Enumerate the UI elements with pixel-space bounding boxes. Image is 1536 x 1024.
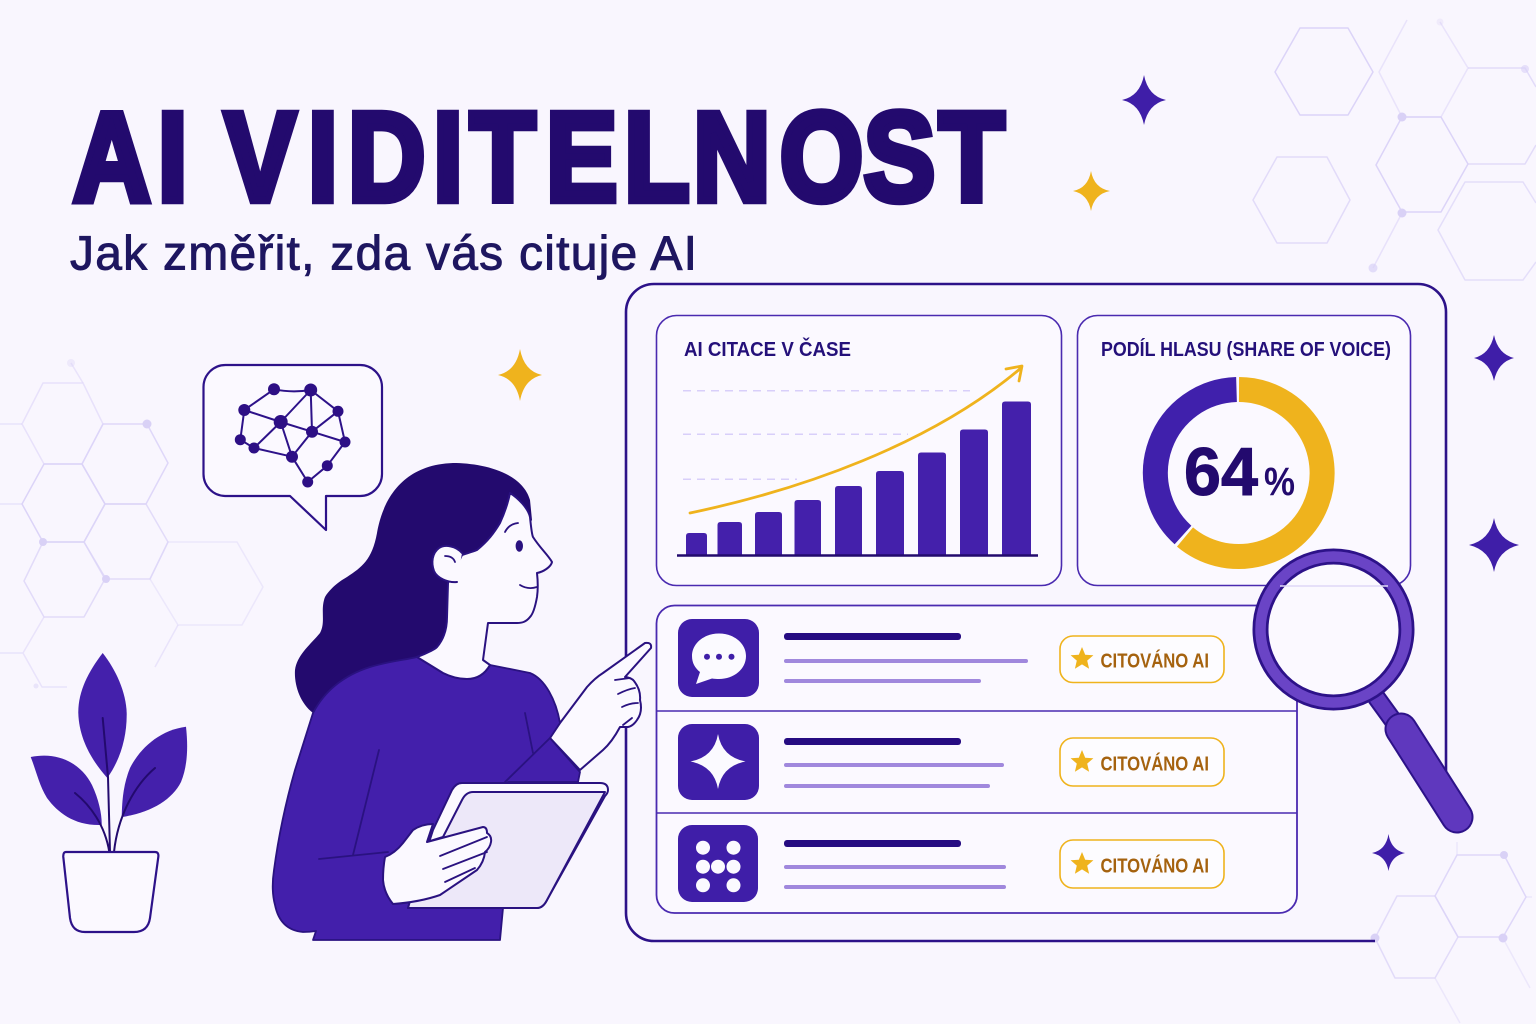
row 2 — [678, 724, 1224, 800]
sparkle: purple right lower — [1469, 518, 1519, 572]
donut value: 64 — [1184, 434, 1258, 510]
donut chart — [1155, 390, 1322, 556]
arm and pointing hand — [550, 643, 651, 770]
speech bubble with brain network — [204, 365, 382, 530]
leaves — [31, 653, 187, 825]
icon: magnifying glass — [1260, 556, 1457, 817]
trend arrow — [690, 366, 1022, 513]
panel: share of voice — [1078, 316, 1410, 586]
icon: chat bubble — [678, 619, 759, 697]
ear — [432, 546, 462, 582]
chart heading: AI CITACE V ČASE — [684, 337, 851, 361]
row 1 — [678, 619, 1224, 697]
badge: cited by AI: CITOVÁNO AI — [1100, 854, 1209, 878]
panel: citation list — [656, 606, 1297, 913]
subtitle: Jak změřit, zda vás cituje AI — [70, 228, 697, 280]
share of voice heading: PODÍL HLASU (SHARE OF VOICE) — [1101, 338, 1391, 361]
sparkle: purple right upper — [1474, 335, 1514, 381]
tablet — [408, 783, 608, 908]
hand holding tablet — [383, 824, 491, 904]
icon: neural brain — [235, 383, 350, 488]
icon: dot grid — [678, 825, 758, 902]
sparkle: yellow top — [1073, 171, 1110, 211]
neck and face — [417, 493, 552, 679]
row 3 — [678, 825, 1224, 902]
sparkle: yellow middle — [498, 349, 542, 401]
dashboard frame — [626, 284, 1446, 941]
title: AI VIDITELNOST — [73, 86, 1004, 227]
sweater folds — [319, 713, 550, 859]
text placeholder lines — [784, 738, 1004, 788]
hair — [295, 463, 532, 713]
text placeholder lines — [784, 633, 1028, 683]
panel: AI citations over time — [656, 316, 1062, 586]
bar chart — [677, 391, 1038, 556]
sparkle: purple top — [1122, 75, 1166, 125]
donut value — [1184, 434, 1295, 510]
badge: cited by AI — [1060, 738, 1224, 786]
badge: cited by AI — [1060, 636, 1224, 682]
sweater — [273, 657, 580, 940]
sparkle: purple bottom — [1372, 834, 1405, 871]
stems — [75, 718, 155, 852]
badge: cited by AI: CITOVÁNO AI — [1100, 752, 1209, 776]
pot — [63, 852, 158, 932]
person pointing at the dashboard — [273, 463, 651, 940]
donut value: % — [1264, 460, 1295, 504]
facial features — [445, 523, 537, 588]
text placeholder lines — [784, 840, 1006, 889]
badge: cited by AI — [1060, 840, 1224, 888]
plant — [31, 653, 187, 932]
badge: cited by AI: CITOVÁNO AI — [1100, 650, 1209, 672]
icon: sparkle — [678, 724, 759, 800]
